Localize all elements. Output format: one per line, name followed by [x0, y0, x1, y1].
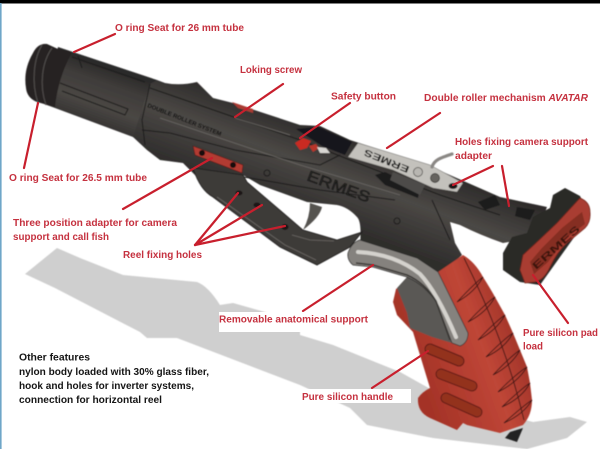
- top black bar: [0, 0, 600, 4]
- gun: top red strip: [232, 102, 253, 113]
- text block: other features: [19, 352, 209, 406]
- label: pure silicon pad load: load: [523, 342, 543, 352]
- gun: silver mechanism plate: [348, 143, 463, 195]
- gun: body engraving: DOUBLE ROLLER SYSTEM: [146, 103, 222, 138]
- text block: other features: connection for horizontal reel: [19, 395, 162, 406]
- label: pure silicon pad load: [523, 328, 598, 352]
- text block: other features: hook and holes for inverter systems,: [19, 381, 194, 392]
- label: three position adapter: [13, 218, 177, 243]
- label: reel fixing holes: Reel fixing holes: [123, 250, 202, 261]
- gun: barrel tube: [44, 47, 165, 140]
- gun: pure silicon butt pad: [520, 198, 590, 283]
- gun: muzzle rings: [25, 44, 72, 107]
- gun: main body and stock: [133, 80, 547, 275]
- label: removable anatomical support: Removable anatomical support: [219, 314, 369, 326]
- gun: line release lever: [432, 154, 452, 167]
- callout leader lines: [24, 34, 568, 388]
- label: three position adapter: Three position adapter for camera: [13, 218, 177, 229]
- gun: silver mechanism plate: ERMES: [362, 146, 411, 174]
- gun: three position adapter: [193, 146, 243, 173]
- gun: grip foot: [505, 428, 523, 442]
- text block: other features: nylon body loaded with 30% glass fiber,: [19, 367, 209, 378]
- gun: removable anatomical support: [348, 240, 468, 346]
- label: holes fixing camera support adapter: Holes fixing camera support: [455, 137, 589, 148]
- label: removable anatomical support: [219, 312, 372, 332]
- label: holes fixing camera support adapter: adapter: [455, 151, 492, 162]
- label: pure silicon pad load: Pure silicon pad: [523, 328, 598, 339]
- text block: other features: Other features: [19, 352, 90, 364]
- label: pure silicon handle: [300, 389, 411, 403]
- grip slots: [430, 349, 477, 412]
- left edge strip: [0, 3, 2, 449]
- gun: ERMES side lettering: ERMES: [305, 168, 372, 206]
- gun: red silicone grip: [393, 255, 532, 433]
- gun: frame with reel holes: [193, 168, 362, 265]
- ground shadow of the speargun: [25, 248, 587, 449]
- gun: safety button: [295, 138, 330, 153]
- label: three position adapter: support and call fish: [13, 232, 109, 243]
- gun: grip side plate: [397, 277, 452, 343]
- grip ribs: [457, 258, 532, 423]
- gun: pure silicon butt pad: ERMES: [531, 224, 583, 272]
- label: holes fixing camera support adapter: [455, 137, 589, 162]
- gun: trigger: [303, 203, 322, 230]
- label: O ring seat 26 mm: O ring Seat for 26 mm tube: [115, 23, 244, 34]
- label: O ring seat 26.5 mm: O ring Seat for 26.5 mm tube: [9, 173, 147, 184]
- label: locking screw: Loking screw: [240, 65, 302, 76]
- label: pure silicon handle: Pure silicon handle: [302, 392, 393, 403]
- gun: butt block: [503, 188, 590, 285]
- gun: body grooves and highlights: [142, 84, 535, 240]
- label: safety button: Safety button: [331, 92, 396, 102]
- label: double roller mechanism: Double roller mechanism AVATAR: [424, 93, 589, 104]
